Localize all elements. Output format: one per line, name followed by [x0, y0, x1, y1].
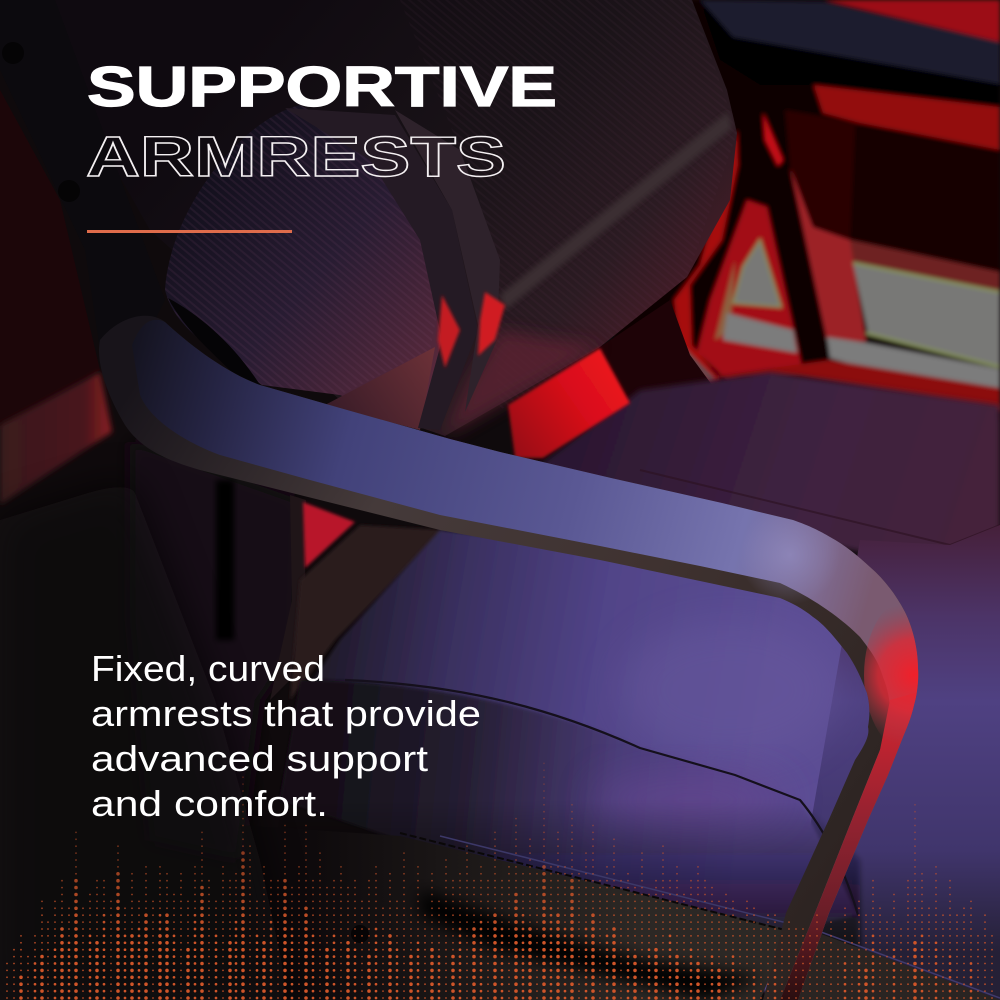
thin red curved edge and lower frame [674, 130, 738, 386]
halftone dot equalizer pattern [7, 760, 992, 998]
pillow stripes texture [165, 105, 440, 395]
pale red band over pane [850, 240, 1000, 292]
armrest colour surfaces [132, 320, 964, 1000]
body line 2: armrests that provide [91, 693, 481, 734]
seat stitching [345, 680, 858, 915]
maroon strut shadow [785, 110, 860, 240]
screw [351, 925, 369, 943]
right lower seat band [780, 934, 1000, 1000]
front bolster [280, 680, 858, 930]
armrest blue top surface [132, 320, 935, 1000]
small red accent [763, 113, 783, 166]
body line 1: Fixed, curved [91, 648, 325, 689]
bright lower window strip [827, 337, 1000, 388]
dark base under backrest [600, 300, 712, 405]
bolster bottom shade [280, 800, 860, 950]
red frame around triangle [697, 200, 802, 380]
bright lower triangle strip [723, 313, 797, 353]
lumbar pillow [165, 105, 440, 404]
orange divider [87, 230, 292, 233]
maroon-red strut [790, 167, 866, 342]
title line 1: SUPPORTIVE: SUPPORTIVE [87, 55, 557, 119]
navy far armrest bar [700, 0, 1000, 84]
pillow strap [285, 108, 478, 430]
dashed stitching [400, 833, 785, 930]
backrest side frame [0, 0, 165, 350]
dark back wall [850, 125, 1000, 272]
bright red block [508, 348, 630, 458]
seat back cushion [520, 372, 1000, 560]
dark column below arm [130, 440, 300, 860]
red bend glow [864, 595, 964, 755]
backrest red lower edge [445, 330, 600, 436]
large dots [21, 850, 915, 998]
armrest highlight [740, 505, 840, 605]
black column gap [216, 480, 234, 640]
body line 4: and comfort. [91, 783, 328, 824]
olive pane edges [853, 263, 1000, 367]
upper red wall [813, 83, 1000, 150]
left skirting band [0, 372, 112, 505]
small dots [7, 760, 992, 998]
window scene, softly blurred [600, 0, 1000, 420]
warm light on frame [715, 260, 735, 340]
window backdrop dark [615, 0, 996, 392]
lower left dark fade [0, 480, 290, 1000]
medium dots [35, 905, 971, 998]
title [86, 55, 557, 189]
left wall maroon [0, 90, 100, 430]
bright triangle pane [733, 240, 781, 307]
seat back seam [640, 470, 1000, 545]
strap outer [395, 110, 500, 412]
grey chrome curve [682, 350, 712, 380]
body line 3: advanced support [91, 738, 428, 779]
lower pillow wedge [325, 347, 435, 430]
navy piping [440, 836, 795, 925]
seat bright patch [620, 620, 840, 760]
red lower sill [700, 360, 1000, 410]
black band under arm bar [700, 0, 1000, 107]
right piping [821, 932, 1000, 998]
top right red corner [825, 0, 1000, 42]
red leg face [780, 690, 925, 1000]
title line 2: ARMRESTS outline: ARMRESTS [86, 125, 506, 189]
black shadow under seat [420, 890, 763, 1000]
red glow wedge [303, 502, 355, 568]
brown floor strip [290, 525, 445, 700]
black crescent under pillow [168, 298, 262, 388]
frame bolts [2, 42, 24, 64]
strap red reflections [438, 295, 460, 368]
backrest seam [500, 112, 732, 310]
backrest mesh [334, 0, 737, 436]
backrest stripes texture [400, 0, 737, 410]
body text [91, 648, 481, 824]
bolster highlight [595, 772, 785, 828]
lower grey seat band [240, 825, 790, 1000]
armrest silhouette rim [99, 316, 918, 1000]
seat right of arm [780, 525, 1000, 1000]
seat cushion [280, 530, 900, 1000]
bright right window pane [853, 263, 1000, 367]
column strap [270, 495, 306, 700]
